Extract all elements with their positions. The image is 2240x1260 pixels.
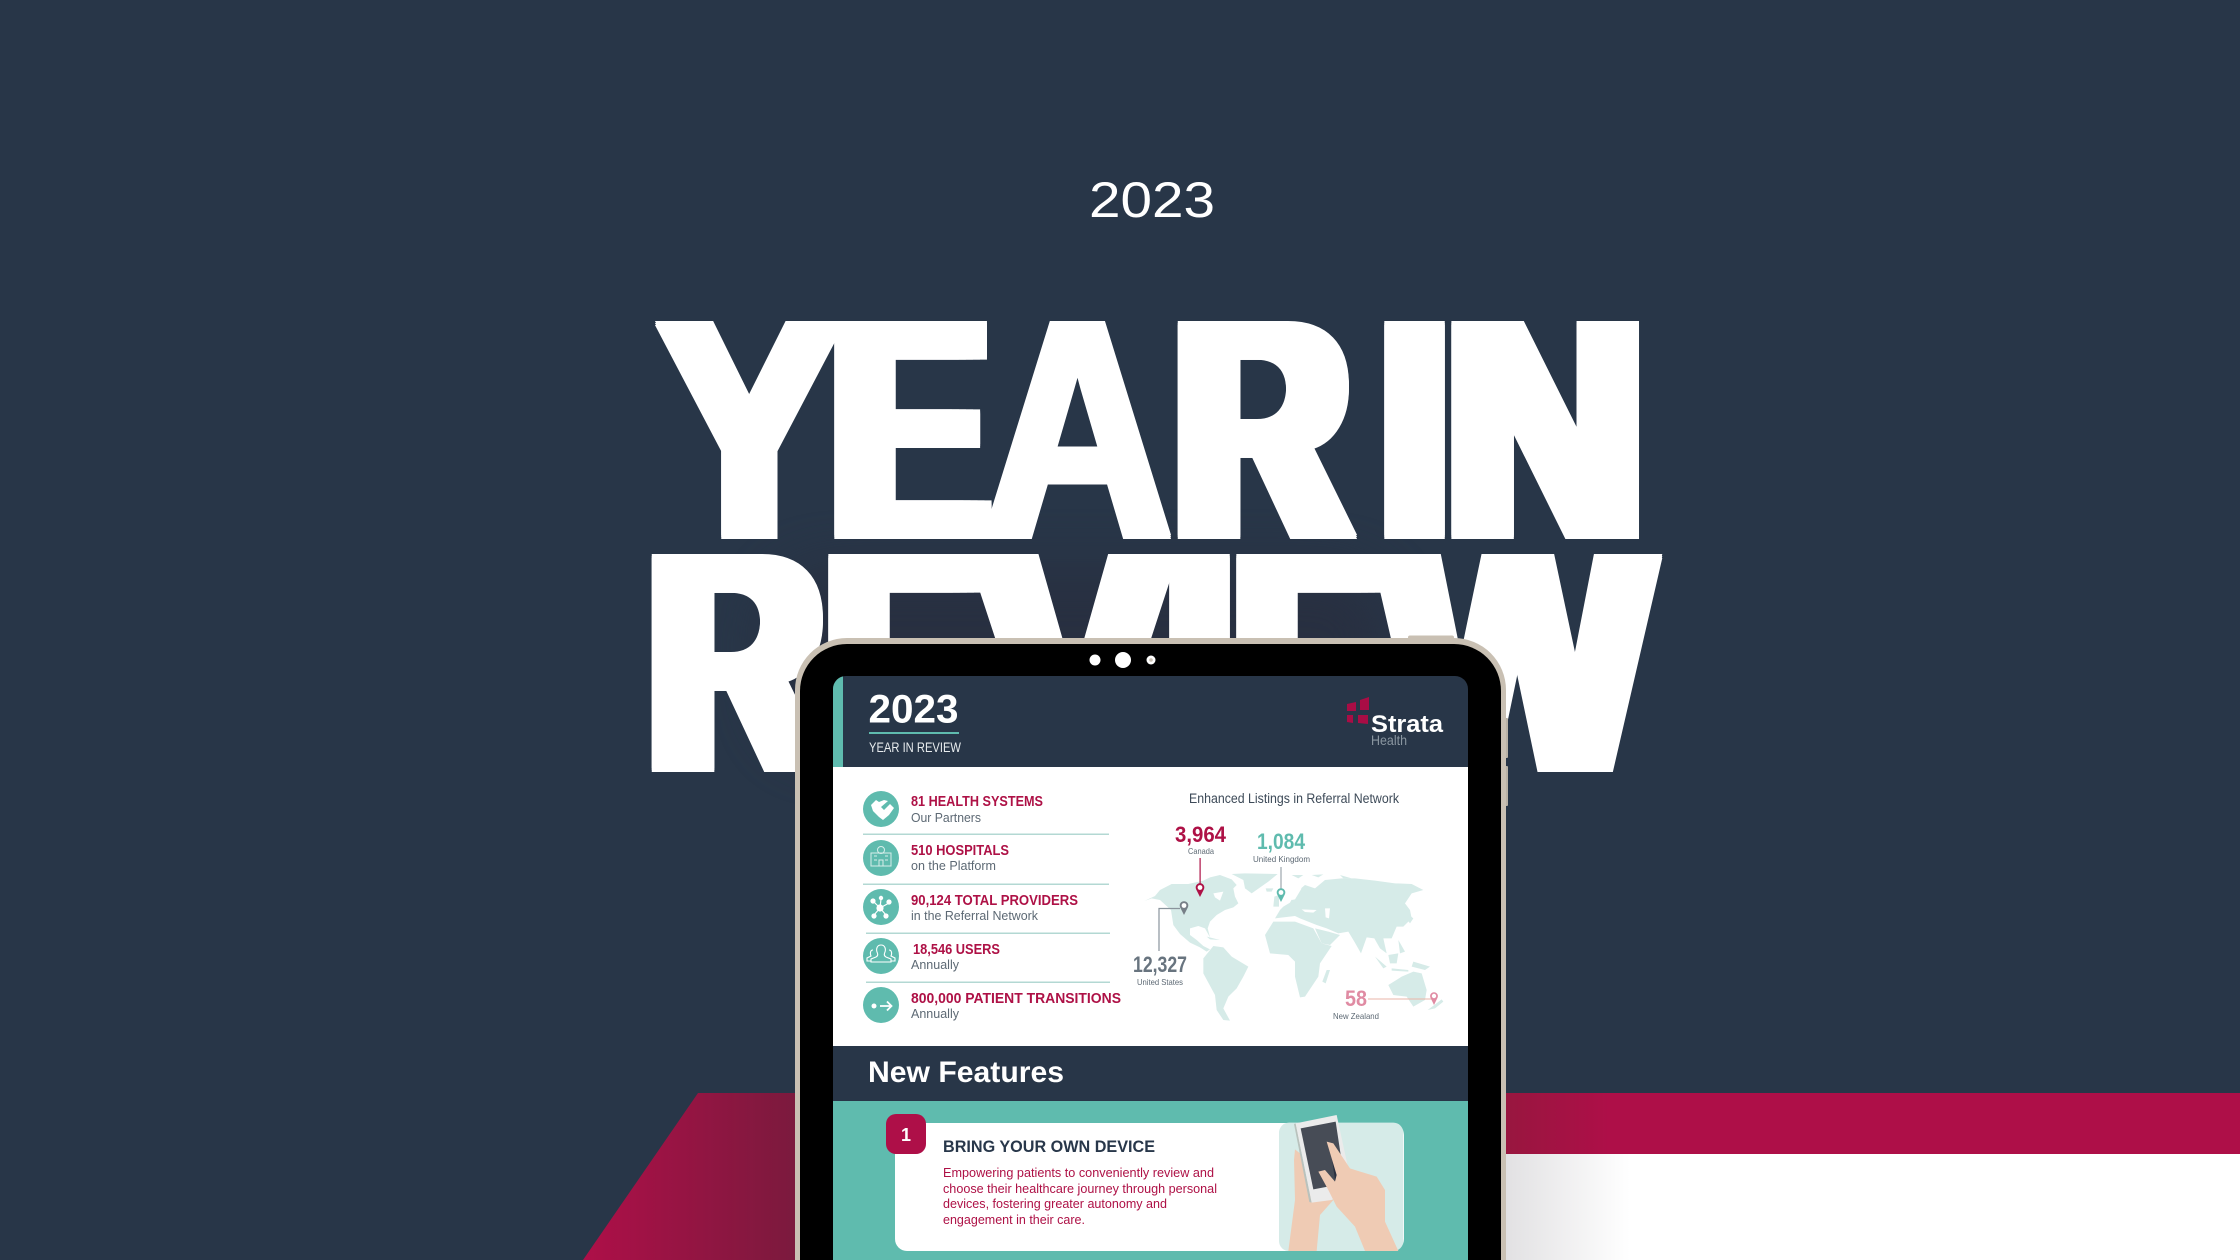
stat: users: Annually: [911, 957, 959, 972]
callout: United States: 12,327: [1133, 952, 1187, 977]
screen white background: [833, 700, 1468, 1260]
callout: United States: United States: [1137, 977, 1183, 987]
card description: [943, 1165, 1217, 1227]
headline: YEAR IN REVIEW: R: [650, 488, 822, 836]
callout: United Kingdom: [1253, 829, 1310, 902]
callout: New Zealand: 58: [1345, 986, 1367, 1011]
headline: YEAR IN REVIEW: I: [1383, 255, 1446, 603]
stat: users: 18,546 USERS: [913, 942, 1000, 958]
stat: hospitals: on the Platform: [911, 858, 996, 873]
card description: engagement in their care.: [943, 1212, 1085, 1227]
tablet frame: [795, 636, 1508, 1260]
callout: Canada: Canada: [1188, 846, 1214, 856]
stat: hospitals: 510 HOSPITALS: [911, 843, 1009, 859]
card title: BRING YOUR OWN DEVICE: [943, 1137, 1155, 1156]
headline: YEAR IN REVIEW: A: [982, 255, 1173, 603]
stat: health systems: 81 HEALTH SYSTEMS: [911, 794, 1043, 810]
headline: YEAR IN REVIEW: E: [827, 488, 981, 836]
teal features panel: [833, 1101, 1468, 1260]
stat: hospitals: [863, 840, 1009, 876]
stat: health systems: Our Partners: [911, 810, 981, 825]
callout: New Zealand: New Zealand: [1333, 1011, 1379, 1021]
number badge: 1: [901, 1125, 911, 1145]
headline: YEAR IN REVIEW: E: [833, 255, 987, 603]
headline: YEAR IN REVIEW: I: [1168, 488, 1231, 836]
illustration: hands holding phone: [1279, 1115, 1403, 1251]
card description: choose their healthcare journey through personal: [943, 1181, 1217, 1196]
Strata Health logo: Health: [1371, 732, 1407, 748]
map title: Enhanced Listings in Referral Network: [1189, 791, 1399, 806]
headline: YEAR IN REVIEW: V: [981, 488, 1165, 836]
headline: YEAR IN REVIEW: E: [1235, 488, 1389, 836]
camera dots: [1090, 652, 1156, 668]
number badge: [886, 1114, 926, 1154]
stat: patient transitions: Annually: [911, 1006, 959, 1021]
headline: YEAR IN REVIEW: N: [1447, 255, 1644, 603]
stat: health systems: [863, 791, 1043, 827]
headline: YEAR IN REVIEW: R: [1176, 255, 1347, 603]
year label: 2023: [1089, 172, 1215, 228]
card description: devices, fostering greater autonomy and: [943, 1196, 1167, 1211]
screen header: YEAR IN REVIEW: [869, 739, 962, 755]
world map: [1144, 873, 1443, 1021]
card description: Empowering patients to conveniently review and: [943, 1165, 1214, 1180]
stat: total providers: [863, 889, 1078, 925]
callout: United States: [1133, 901, 1188, 987]
callout: New Zealand: [1333, 986, 1438, 1021]
new features band: New Features: [868, 1056, 1064, 1089]
Strata Health logo: [1347, 697, 1444, 748]
callout: United Kingdom: 1,084: [1257, 829, 1306, 854]
screen header: 2023: [868, 688, 958, 732]
stat: patient transitions: [863, 987, 1121, 1023]
stat: total providers: 90,124 TOTAL PROVIDERS: [911, 893, 1078, 909]
headline: YEAR IN REVIEW: [650, 255, 1662, 836]
callout: Canada: 3,964: [1175, 822, 1227, 847]
callout: United Kingdom: United Kingdom: [1253, 854, 1310, 864]
stat: total providers: in the Referral Network: [911, 908, 1038, 923]
stat: patient transitions: 800,000 PATIENT TRANSITIONS: [911, 991, 1121, 1007]
headline: YEAR IN REVIEW: W: [1386, 488, 1648, 836]
Strata Health logo: Strata: [1371, 711, 1444, 738]
feature card: [895, 1123, 1404, 1251]
stat: users: [863, 938, 1000, 974]
screen header: [833, 676, 1468, 767]
callout: Canada: [1175, 822, 1227, 897]
headline: YEAR IN REVIEW: Y: [659, 255, 839, 603]
new features band: [833, 1046, 1468, 1101]
